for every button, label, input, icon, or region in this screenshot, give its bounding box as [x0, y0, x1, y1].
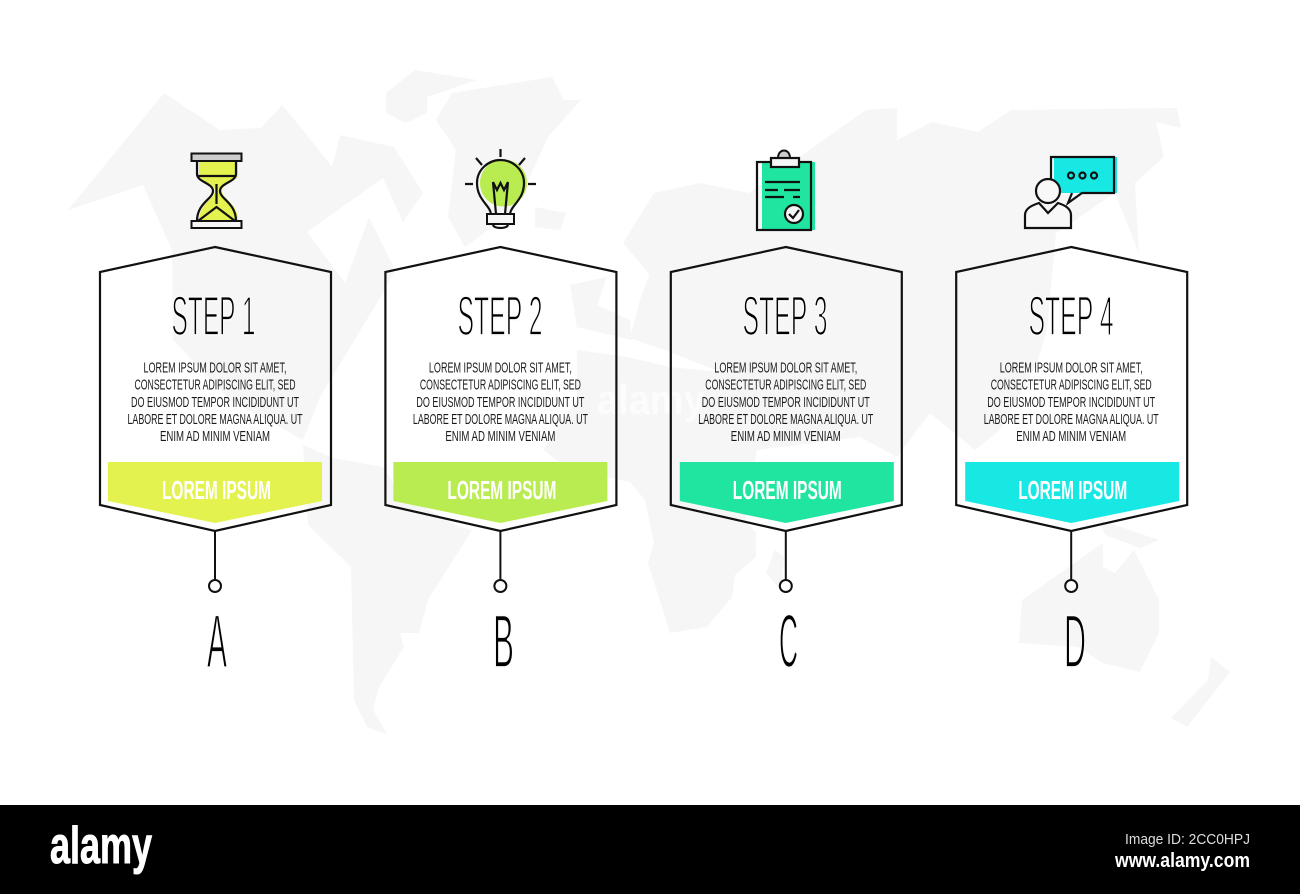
body text: CONSECTETUR ADIPISCING ELIT, SED — [420, 376, 581, 394]
hexagon outline — [385, 247, 616, 531]
ribbon label: LOREM IPSUM — [447, 475, 556, 505]
footer bar — [0, 805, 1300, 894]
body text: ENIM AD MINIM VENIAM — [160, 428, 270, 445]
ribbon label: LOREM IPSUM — [1018, 475, 1127, 505]
ribbon label — [108, 462, 322, 523]
image id: Image ID: 2CC0HPJ — [1125, 831, 1250, 848]
icon: light bulb — [465, 149, 536, 228]
body text: DO EIUSMOD TEMPOR INCIDIDUNT UT — [702, 394, 870, 411]
panel: step 3: STEP 3 — [742, 285, 828, 347]
body text: CONSECTETUR ADIPISCING ELIT, SED — [991, 376, 1152, 394]
body text: ENIM AD MINIM VENIAM — [731, 428, 841, 445]
body text: LOREM IPSUM DOLOR SIT AMET, — [144, 360, 286, 376]
body text: DO EIUSMOD TEMPOR INCIDIDUNT UT — [416, 394, 584, 411]
body text: LABORE ET DOLORE MAGNA ALIQUA. UT — [128, 411, 302, 428]
body text: LABORE ET DOLORE MAGNA ALIQUA. UT — [698, 411, 873, 428]
watermark: alamy — [597, 376, 706, 423]
body text: LOREM IPSUM DOLOR SIT AMET, — [1000, 360, 1143, 376]
panel: step 4 — [956, 157, 1187, 683]
hexagon outline — [100, 247, 331, 531]
panel: step 3 — [671, 150, 902, 683]
panel: step 1: STEP 1 — [172, 285, 256, 347]
background world map — [68, 70, 1230, 735]
panel: step 2: B — [493, 599, 514, 683]
body text: DO EIUSMOD TEMPOR INCIDIDUNT UT — [987, 394, 1155, 411]
ribbon label — [965, 462, 1179, 523]
icon: hourglass — [192, 154, 242, 228]
panel: step 4: STEP 4 — [1028, 285, 1114, 347]
body text — [413, 360, 588, 445]
panel: step 3: C — [779, 599, 798, 683]
panel: step 4: D — [1064, 599, 1086, 683]
connector — [780, 531, 792, 592]
body text: LABORE ET DOLORE MAGNA ALIQUA. UT — [984, 411, 1159, 428]
icon: person with speech bubble — [1025, 157, 1117, 228]
body text — [698, 360, 873, 445]
connector — [494, 531, 506, 592]
alamy logo: alamy — [50, 817, 152, 875]
ribbon label — [393, 462, 607, 523]
body text: LABORE ET DOLORE MAGNA ALIQUA. UT — [413, 411, 588, 428]
website: www.alamy.com — [1114, 850, 1250, 872]
panel: step 1: A — [207, 599, 227, 683]
panel: step 1 — [100, 154, 331, 683]
ribbon label — [680, 462, 894, 523]
icon: clipboard — [757, 150, 815, 230]
connector — [1065, 531, 1077, 592]
body text: CONSECTETUR ADIPISCING ELIT, SED — [134, 376, 296, 394]
body text: CONSECTETUR ADIPISCING ELIT, SED — [705, 376, 866, 394]
panel: step 2: STEP 2 — [458, 285, 542, 347]
hexagon outline — [671, 247, 902, 531]
hexagon outline — [956, 247, 1187, 531]
body text — [128, 360, 302, 445]
body text: ENIM AD MINIM VENIAM — [1016, 428, 1126, 445]
body text: DO EIUSMOD TEMPOR INCIDIDUNT UT — [131, 394, 299, 411]
connector — [209, 531, 221, 592]
ribbon label: LOREM IPSUM — [733, 475, 842, 505]
body text — [984, 360, 1159, 445]
body text: LOREM IPSUM DOLOR SIT AMET, — [429, 360, 572, 376]
body text: ENIM AD MINIM VENIAM — [445, 428, 555, 445]
body text: LOREM IPSUM DOLOR SIT AMET, — [714, 360, 857, 376]
panel: step 2 — [385, 149, 616, 683]
ribbon label: LOREM IPSUM — [162, 475, 271, 505]
